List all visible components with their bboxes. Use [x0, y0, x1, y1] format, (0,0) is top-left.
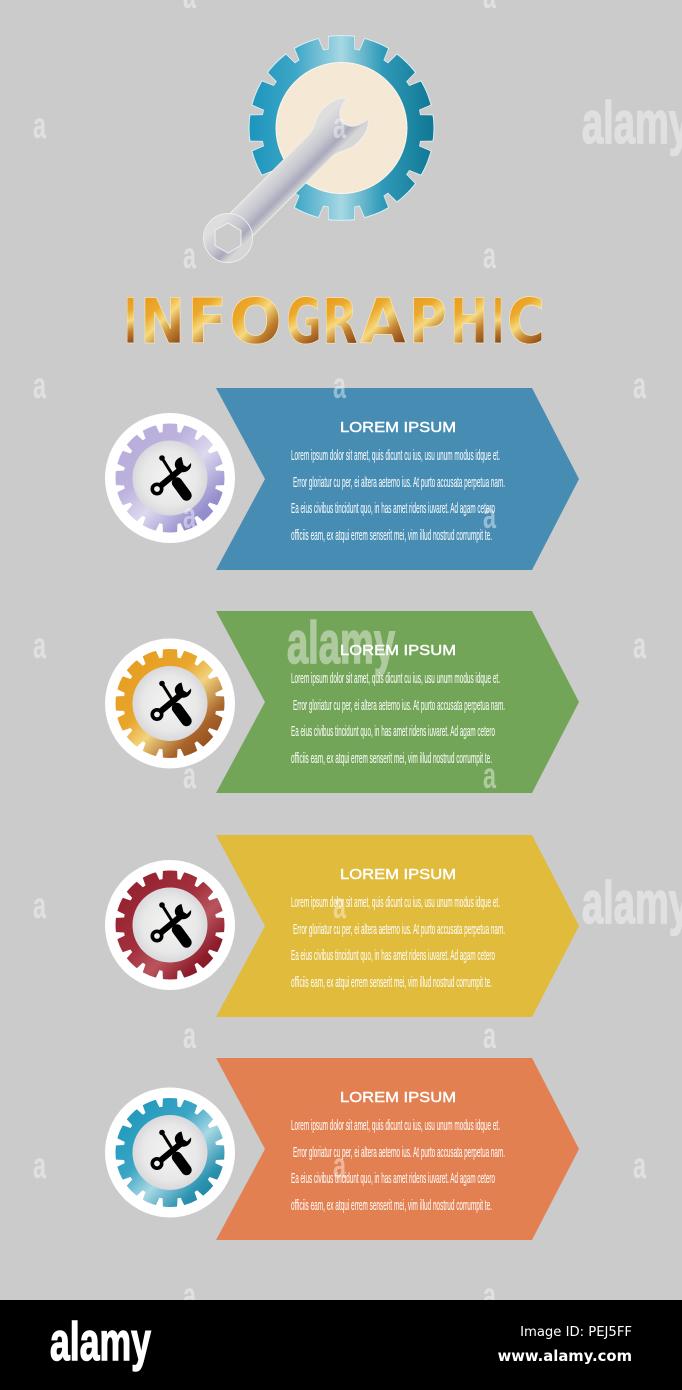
blue text block	[291, 419, 505, 544]
watermark pattern: alamy	[287, 610, 395, 676]
icon: purple gear with tools	[105, 413, 235, 543]
watermark pattern: a	[633, 1145, 646, 1186]
orange arrow banner	[216, 1058, 579, 1240]
watermark pattern: a	[333, 885, 346, 926]
watermark pattern: a	[183, 495, 196, 536]
icon: gold gear with tools	[105, 638, 235, 768]
green text block	[291, 642, 505, 767]
panel: blue step	[216, 388, 579, 570]
watermark pattern: a	[483, 1015, 496, 1056]
watermark pattern: a	[33, 105, 46, 146]
watermark pattern: a	[483, 235, 496, 276]
watermark pattern: a	[333, 1145, 346, 1186]
yellow arrow banner	[216, 835, 579, 1017]
watermark pattern: a	[333, 365, 346, 406]
watermark pattern: a	[33, 625, 46, 666]
yellow text block	[291, 866, 505, 991]
watermark pattern: a	[483, 755, 496, 796]
title: I	[124, 285, 137, 358]
watermark pattern: a	[333, 105, 346, 146]
watermark pattern: a	[183, 1015, 196, 1056]
watermark pattern: a	[633, 365, 646, 406]
watermark pattern: a	[33, 1145, 46, 1186]
watermark pattern: a	[33, 885, 46, 926]
gear ring	[247, 34, 436, 222]
title: R	[322, 285, 358, 358]
website: www.alamy.com	[498, 1348, 632, 1365]
watermark pattern: a	[483, 1275, 496, 1316]
title: N	[140, 285, 185, 358]
title: C	[507, 285, 545, 358]
icon: red gear with tools	[105, 860, 235, 990]
blue arrow banner	[216, 388, 579, 570]
title: G	[286, 285, 322, 358]
title: A	[360, 285, 406, 358]
watermark pattern: a	[633, 625, 646, 666]
panel: orange step	[216, 1058, 579, 1240]
footer logo: alamy	[50, 1312, 151, 1372]
watermark pattern: a	[183, 1275, 196, 1316]
title: F	[187, 285, 227, 358]
title: H	[450, 285, 488, 358]
orange text block	[291, 1089, 505, 1214]
title: O	[229, 285, 282, 358]
watermark pattern: a	[183, 755, 196, 796]
green arrow banner	[216, 611, 579, 793]
title: P	[409, 285, 447, 358]
footer bar	[0, 1300, 682, 1390]
panel: green step	[216, 611, 579, 793]
wrench	[193, 91, 375, 273]
image id: Image ID: PEJ5FF	[520, 1325, 632, 1340]
panel: yellow step	[216, 835, 579, 1017]
icon: blue gear with tools	[105, 1088, 235, 1218]
watermark pattern: a	[483, 495, 496, 536]
watermark pattern: a	[183, 235, 196, 276]
icon: gear and wrench	[193, 34, 436, 273]
title: I	[492, 285, 504, 358]
watermark pattern: a	[33, 365, 46, 406]
